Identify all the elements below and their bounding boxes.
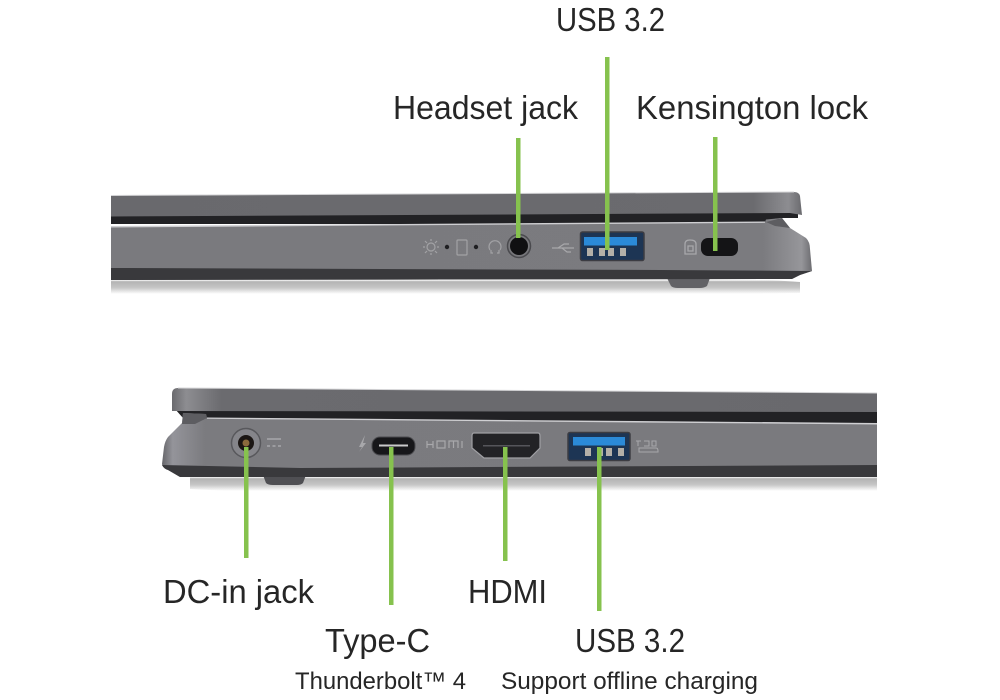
- surface shadow: [190, 477, 877, 491]
- headset jack: [508, 234, 530, 258]
- hinge shade: [766, 218, 790, 228]
- thunderbolt symbol: [359, 435, 366, 452]
- laptop: left side view: [162, 388, 877, 491]
- pointer: bottom USB 3.2: [597, 447, 602, 611]
- USB offline charging symbol: [636, 441, 658, 452]
- label: DC-in jack: DC-in jack: [163, 573, 314, 610]
- base bottom edge: [111, 268, 812, 280]
- lid top highlight: [111, 192, 794, 196]
- DC-in jack: [232, 428, 260, 458]
- laptop base: [111, 218, 812, 280]
- hinge gap: [175, 409, 877, 425]
- USB 3.2 port (bottom): [568, 432, 630, 460]
- pointer: DC-in jack: [244, 447, 248, 558]
- Type-C port: [372, 437, 415, 455]
- hinge gap: [111, 212, 798, 224]
- USB 3.2 port (top): [580, 232, 644, 260]
- label: USB 3.2 top: USB 3.2: [556, 1, 665, 38]
- pointer: top USB 3.2: [605, 57, 610, 250]
- DC symbol: [267, 439, 281, 446]
- laptop lid: [172, 388, 877, 412]
- base top highlight: [207, 418, 877, 424]
- laptop lid: [111, 192, 802, 216]
- hinge shade: [182, 413, 207, 424]
- lock symbol: [685, 240, 696, 254]
- label: HDMI: HDMI: [468, 573, 547, 610]
- Kensington lock slot: [701, 238, 738, 256]
- HDMI symbol: [427, 441, 462, 448]
- pointer lines: [244, 57, 718, 611]
- label: Headset jack: Headset jack: [393, 89, 578, 126]
- status icons: [423, 239, 501, 255]
- laptop: right side view: [111, 192, 812, 294]
- USB symbol: [552, 244, 574, 252]
- pointer: headset jack: [516, 138, 520, 238]
- sublabel: Support offline charging: Support offline charging: [501, 668, 758, 695]
- label: Type-C: Type-C: [325, 622, 430, 659]
- base bottom edge: [162, 465, 877, 477]
- label: Kensington lock: Kensington lock: [636, 89, 868, 126]
- sublabel: Thunderbolt 4: Thunderbolt™ 4: [295, 668, 466, 695]
- rubber foot: [263, 475, 306, 485]
- LED indicators: [445, 245, 478, 249]
- pointer: HDMI: [503, 447, 508, 561]
- pointer: Type-C: [389, 447, 394, 605]
- label: USB 3.2 bottom: USB 3.2: [575, 622, 685, 659]
- surface shadow: [111, 280, 800, 294]
- rubber foot: [667, 278, 710, 288]
- HDMI port: [472, 433, 540, 458]
- pointer: Kensington lock: [713, 137, 718, 251]
- lid top highlight: [178, 388, 877, 394]
- laptop base: [162, 413, 877, 477]
- base top highlight: [111, 222, 765, 228]
